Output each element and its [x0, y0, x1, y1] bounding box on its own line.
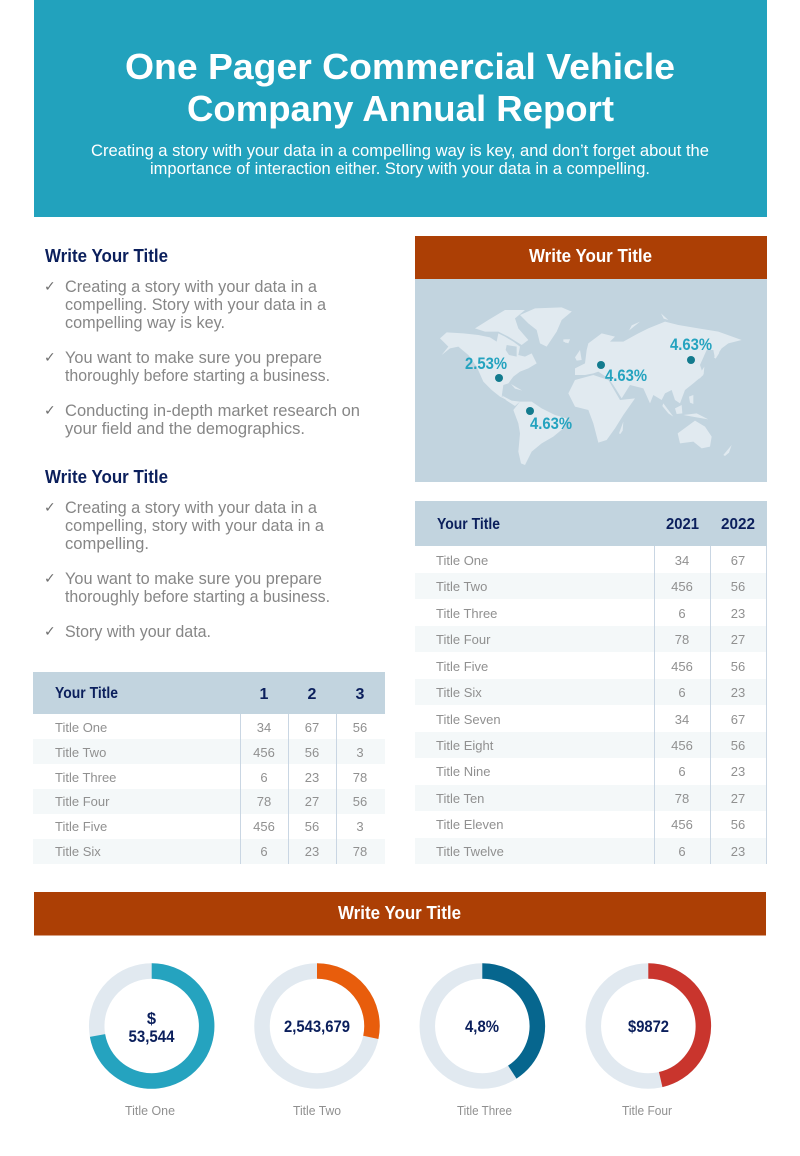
table rows: Title Six [436, 685, 482, 700]
table rows: 3 [356, 745, 364, 760]
bullet: creating a story: ✓ [44, 279, 56, 295]
heading: Write Your Title [45, 246, 168, 266]
donut: title two [262, 971, 372, 1118]
table header: 2021 [666, 516, 699, 533]
bullet: market research: your field and the demographics. [65, 420, 305, 438]
header banner [34, 0, 767, 217]
table rows: 456 [671, 579, 693, 594]
table header: Your Title [437, 516, 500, 533]
map heading: Write Your Title [529, 246, 652, 266]
bullet: creating a story: ✓ [44, 500, 56, 516]
bullet: creating a story: compelling. [65, 535, 149, 553]
table rows: Title Three [55, 770, 116, 785]
table header: 3 [356, 686, 365, 703]
bullet: market research: Conducting in-depth market research on [65, 402, 360, 420]
table rows: Title Five [55, 819, 107, 834]
marker: asia 4.63% [670, 335, 712, 364]
marker: europe 4.63%: 4.63% [605, 366, 647, 385]
world map [440, 307, 742, 465]
marker: south america 4.63% [526, 407, 572, 433]
donut: title one: Title One [125, 1103, 175, 1118]
bullet: creating a story: Creating a story with your data in a [65, 278, 318, 296]
bullet: story: Story with your data. [65, 623, 211, 641]
table rows: Title Ten [436, 791, 484, 806]
section heading: Write Your Title [338, 903, 461, 923]
table rows: 23 [731, 844, 745, 859]
table rows: 23 [305, 770, 319, 785]
table header: 2022 [721, 516, 755, 533]
map heading [415, 236, 767, 279]
heading: Write Your Title [45, 467, 168, 487]
table header: Your Title [55, 685, 118, 702]
table rows: 6 [260, 770, 268, 785]
table rows: 56 [731, 817, 745, 832]
table rows: 23 [305, 844, 319, 859]
donut: title four [593, 971, 703, 1118]
table rows: 34 [675, 553, 689, 568]
table rows: 56 [305, 819, 319, 834]
bullet: prepare: ✓ [44, 350, 56, 366]
section heading [34, 892, 766, 936]
donut: title four: $9872 [628, 1018, 669, 1036]
table rows: 6 [678, 606, 686, 621]
table: numbered values [33, 672, 385, 864]
table rows: Title Six [55, 844, 101, 859]
donut: title one [97, 971, 207, 1118]
table rows: Title Two [55, 745, 106, 760]
table rows: 56 [731, 738, 745, 753]
table rows: 6 [678, 844, 686, 859]
table rows: 456 [253, 745, 275, 760]
panel: donut charts [34, 892, 766, 1118]
table rows: 23 [731, 764, 745, 779]
table header: 1 [260, 686, 269, 703]
eurasia, africa and oceania [565, 311, 742, 456]
table rows: 6 [260, 844, 268, 859]
bullet: story: ✓ [44, 624, 56, 640]
bullet: market research [44, 402, 360, 438]
bullet: creating a story [44, 499, 325, 553]
table rows: 56 [353, 794, 367, 809]
donut: title four: Title Four [622, 1103, 673, 1118]
bullet: creating a story [44, 278, 327, 332]
table rows: 456 [671, 817, 693, 832]
panel: world map [415, 236, 767, 482]
table rows: 23 [731, 685, 745, 700]
donut: title three: Title Three [457, 1103, 512, 1118]
table rows: 78 [675, 791, 689, 806]
title [125, 46, 675, 129]
table rows: 56 [731, 659, 745, 674]
bullet: prepare: You want to make sure you prepare [65, 349, 322, 367]
marker: asia 4.63%: 4.63% [670, 335, 712, 354]
table rows: 56 [305, 745, 319, 760]
americas and greenland [440, 307, 572, 465]
table rows: 56 [353, 720, 367, 735]
table rows: 78 [353, 844, 367, 859]
donut: title one: 53,544 [128, 1028, 175, 1046]
table rows: Title Eleven [436, 817, 503, 832]
table rows: 78 [257, 794, 271, 809]
bullet: prepare [44, 349, 330, 385]
table header: 2 [308, 686, 317, 703]
bullet: creating a story: compelling. Story with your data in a [65, 296, 327, 314]
bullet: prepare: You want to make sure you prepare [65, 570, 322, 588]
table rows: 456 [671, 659, 693, 674]
text section: first list [44, 246, 360, 438]
table rows: 27 [731, 791, 745, 806]
table rows: Title One [436, 553, 488, 568]
bullet: creating a story: compelling way is key. [65, 314, 225, 332]
table rows: Title Seven [436, 712, 501, 727]
table rows: 456 [253, 819, 275, 834]
table rows: Title Four [436, 632, 491, 647]
table rows [55, 720, 367, 859]
table rows: Title Twelve [436, 844, 504, 859]
bullet: prepare: thoroughly before starting a business. [65, 588, 330, 606]
subtitle: importance of interaction either. Story with your data in a compelling. [150, 160, 650, 178]
table rows: Title One [55, 720, 107, 735]
table rows: 456 [671, 738, 693, 753]
table rows: 34 [257, 720, 271, 735]
marker: north america 2.53%: 2.53% [465, 354, 507, 373]
donut: title three: 4,8% [465, 1018, 499, 1036]
table rows: 3 [356, 819, 364, 834]
bullet: prepare: ✓ [44, 571, 56, 587]
table rows: Title Nine [436, 764, 490, 779]
table rows: 67 [731, 553, 745, 568]
donut: title two: 2,543,679 [284, 1018, 350, 1036]
donut: title one: $ [147, 1010, 156, 1028]
table rows: 27 [731, 632, 745, 647]
text section: second list [44, 467, 330, 641]
table rows: 6 [678, 685, 686, 700]
table rows: Title Three [436, 606, 497, 621]
title: Company Annual Report [187, 88, 614, 129]
marker: north america 2.53% [465, 354, 507, 382]
subtitle: Creating a story with your data in a compelling way is key, and don’t forget about the [91, 142, 709, 160]
table rows: 27 [305, 794, 319, 809]
marker: south america 4.63%: 4.63% [530, 414, 572, 433]
table rows: 78 [353, 770, 367, 785]
table rows: 23 [731, 606, 745, 621]
table rows: 6 [678, 764, 686, 779]
donut: title two: Title Two [293, 1103, 341, 1118]
table rows: 34 [675, 712, 689, 727]
table rows: 67 [305, 720, 319, 735]
table header [55, 685, 365, 703]
table rows: 67 [731, 712, 745, 727]
table rows: Title Two [436, 579, 487, 594]
bullet: creating a story: compelling, story with your data in a [65, 517, 325, 535]
subtitle [91, 142, 709, 178]
table rows: 56 [731, 579, 745, 594]
table rows [436, 553, 745, 859]
bullet: creating a story: Creating a story with your data in a [65, 499, 318, 517]
table: yearly values [415, 501, 767, 864]
table rows: Title Four [55, 794, 110, 809]
marker: europe 4.63% [597, 361, 647, 385]
table rows: 78 [675, 632, 689, 647]
table rows: Title Eight [436, 738, 494, 753]
title: One Pager Commercial Vehicle [125, 46, 675, 87]
table rows: Title Five [436, 659, 488, 674]
donut: title three [427, 971, 537, 1118]
bullet: prepare [44, 570, 330, 606]
table header [437, 516, 755, 533]
bullet: market research: ✓ [44, 403, 56, 419]
bullet: prepare: thoroughly before starting a business. [65, 367, 330, 385]
